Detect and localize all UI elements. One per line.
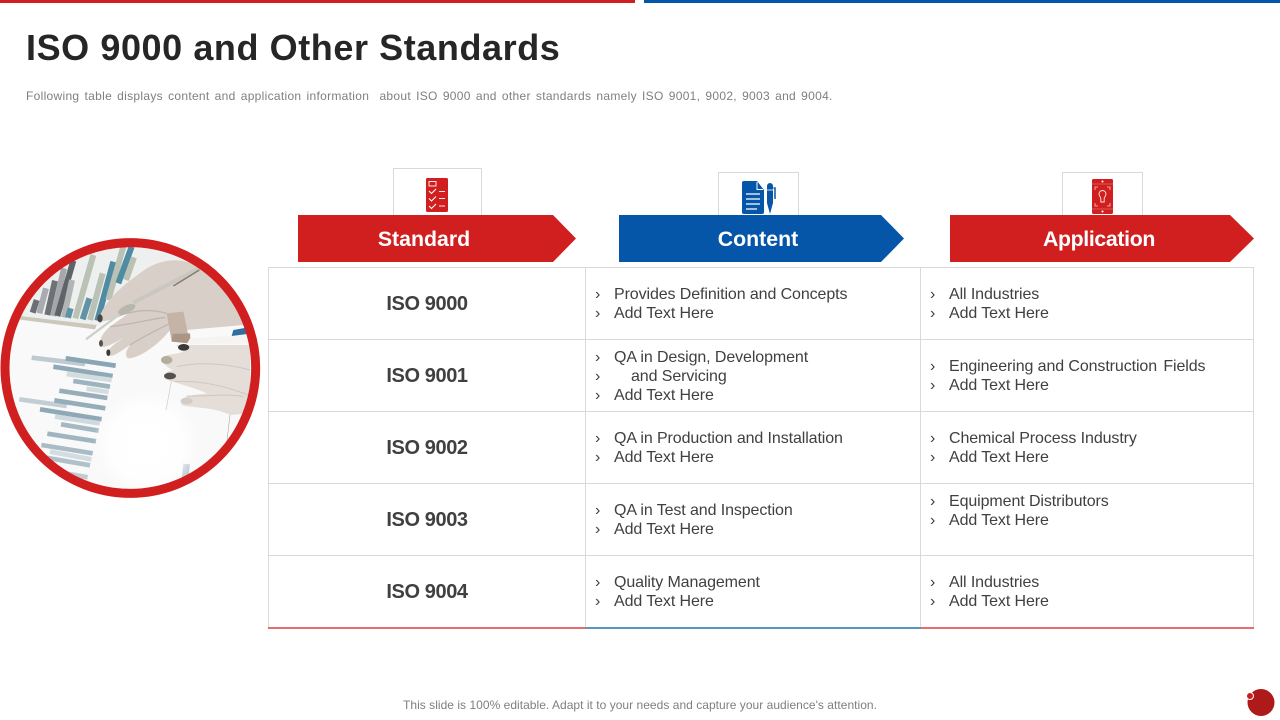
icon: checklist clipboard	[426, 178, 448, 212]
footer note: This slide is 100% editable. Adapt it to your needs and capture your audience's attention.	[403, 698, 877, 712]
row label: ISO 9001: ISO 9001	[386, 365, 468, 387]
content: ISO 9003: QA in Test and Inspection	[614, 502, 793, 519]
header arrow: Application: Application	[1043, 227, 1155, 251]
application: ISO 9001	[930, 358, 1205, 394]
content: ISO 9003	[596, 502, 793, 538]
row label: ISO 9000: ISO 9000	[386, 293, 468, 315]
application: ISO 9001: Add Text Here	[949, 377, 1049, 394]
content: ISO 9004: Add Text Here	[614, 593, 714, 610]
application: ISO 9003: Equipment Distributors	[949, 493, 1109, 510]
application: ISO 9003	[930, 493, 1109, 529]
content: ISO 9002: QA in Production and Installation	[614, 430, 843, 447]
application: ISO 9002: Add Text Here	[949, 449, 1049, 466]
icon box: application	[1062, 172, 1143, 216]
top accent bar: blue	[644, 0, 1280, 3]
icon: document and pen	[742, 181, 776, 214]
application: ISO 9003: Add Text Here	[949, 512, 1049, 529]
header arrow: Content: Content	[718, 227, 798, 251]
content: ISO 9000	[596, 286, 847, 322]
application: ISO 9000: All Industries	[949, 286, 1039, 303]
header arrow: Content	[619, 215, 904, 262]
top accent bar: red	[0, 0, 635, 3]
application: ISO 9001: Engineering and Construction Fields	[949, 358, 1205, 375]
content: ISO 9001: and Servicing	[631, 368, 727, 385]
content: ISO 9000: Provides Definition and Concepts	[614, 286, 847, 303]
content: ISO 9003: Add Text Here	[614, 521, 714, 538]
application: ISO 9004	[930, 574, 1049, 610]
photo: hands reviewing charts in a red ring	[0, 238, 260, 498]
row label: ISO 9003: ISO 9003	[386, 509, 468, 531]
content: ISO 9004: Quality Management	[614, 574, 760, 591]
application: ISO 9000	[930, 286, 1049, 322]
content: ISO 9002: Add Text Here	[614, 449, 714, 466]
icon box: content	[718, 172, 799, 216]
row label: ISO 9002: ISO 9002	[386, 437, 468, 459]
content: ISO 9004	[596, 574, 760, 610]
application: ISO 9002: Chemical Process Industry	[949, 430, 1137, 447]
content: ISO 9002	[596, 430, 843, 466]
application: ISO 9000: Add Text Here	[949, 305, 1049, 322]
content: ISO 9001: QA in Design, Development	[614, 349, 808, 366]
header arrow: Application	[950, 215, 1254, 262]
content: ISO 9001: Add Text Here	[614, 387, 714, 404]
application: ISO 9004: Add Text Here	[949, 593, 1049, 610]
content: ISO 9000: Add Text Here	[614, 305, 714, 322]
header arrow: Standard	[298, 215, 576, 262]
icon box: standard	[393, 168, 482, 216]
header arrow: Standard: Standard	[378, 227, 470, 251]
title: ISO 9000 and Other Standards	[26, 27, 560, 68]
application: ISO 9004: All Industries	[949, 574, 1039, 591]
subtitle: Following table displays content and application information about ISO 9000 and other standards namely ISO 9001, 9002, 9003 and 9004.	[26, 89, 833, 103]
icon: phone with light bulb	[1092, 179, 1113, 214]
row label: ISO 9004: ISO 9004	[386, 581, 468, 603]
logo dot	[1247, 689, 1274, 716]
application: ISO 9002	[930, 430, 1137, 466]
content: ISO 9001	[596, 349, 808, 404]
